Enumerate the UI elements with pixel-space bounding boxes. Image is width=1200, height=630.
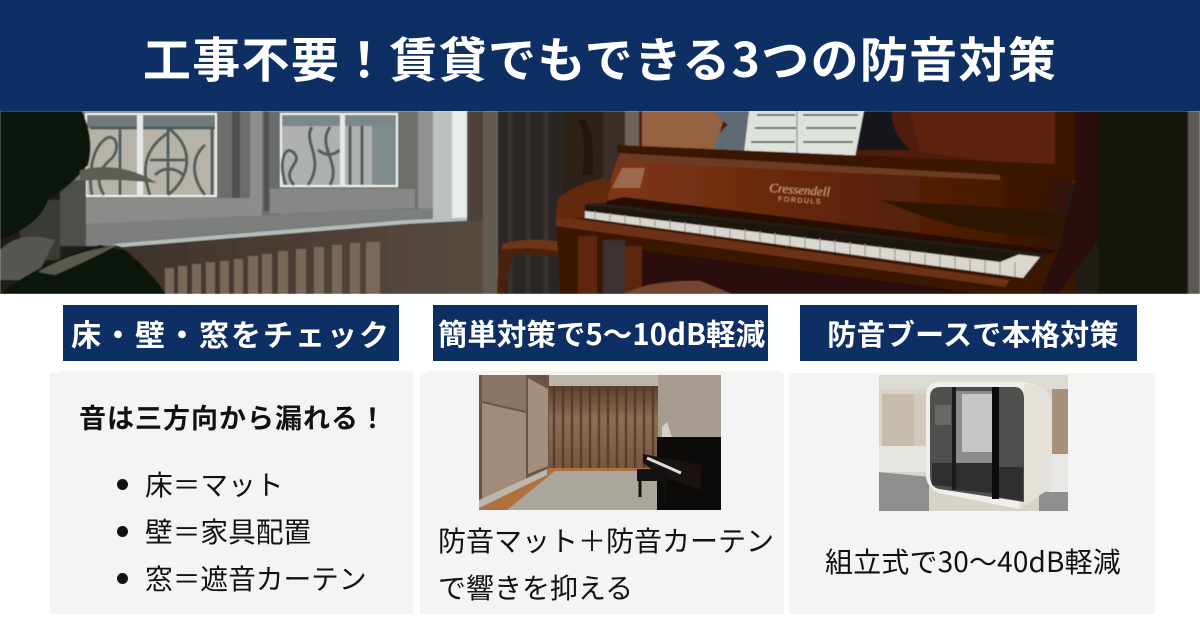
piano fallboard	[608, 145, 1075, 250]
stool	[497, 244, 567, 294]
panel caption	[438, 520, 774, 607]
curtain	[467, 111, 483, 221]
heading: column 3	[800, 305, 1137, 361]
heading: column 3: 防音ブースで本格対策	[827, 312, 1119, 354]
right side	[1040, 111, 1098, 294]
piano keyboard	[585, 204, 1040, 278]
panel edge highlights	[60, 371, 792, 614]
panel lead text: 音は三方向から漏れる！	[79, 397, 387, 436]
panel: simple measures	[420, 373, 784, 614]
piano cheek	[556, 178, 612, 218]
item: wall: 壁＝家具配置	[145, 510, 311, 550]
hero photo: window and upright piano	[0, 111, 1200, 294]
window sill	[112, 217, 479, 248]
photo: room with curtain and piano	[479, 375, 721, 510]
heading: column 2: 簡単対策で5〜10dB軽減	[438, 312, 765, 354]
bullet list	[117, 463, 367, 597]
window frame	[60, 111, 467, 246]
plant	[60, 180, 86, 246]
left piano frame	[603, 111, 625, 201]
title banner: 工事不要！賃貸でもできる3つの防音対策	[143, 20, 1057, 90]
sheet music	[744, 111, 864, 157]
window glass	[85, 113, 217, 197]
panel caption: で響きを抑える	[438, 567, 633, 607]
title banner	[0, 0, 1200, 111]
panel: check floor, walls, windows	[50, 373, 413, 614]
hero photo: window and upright piano: FORDULS	[778, 196, 822, 206]
wall below sill	[86, 220, 483, 294]
piano key slip and lower body	[556, 216, 1075, 294]
item: window: 窓＝遮音カーテン	[145, 557, 367, 597]
item: floor: 床＝マット	[145, 463, 283, 503]
photo: soundproof booth	[879, 375, 1068, 511]
panel: soundproof booth	[790, 373, 1155, 614]
piano upper panel	[639, 111, 1075, 183]
panel caption: 組立式で30〜40dB軽減	[825, 541, 1121, 581]
maker name on fallboard: Cressendell	[769, 180, 831, 199]
wrought iron balcony	[90, 126, 362, 195]
radiator	[165, 242, 380, 294]
heading: column 1: 床・壁・窓をチェック	[71, 311, 391, 355]
panel caption: 防音マット＋防音カーテン	[438, 520, 774, 560]
